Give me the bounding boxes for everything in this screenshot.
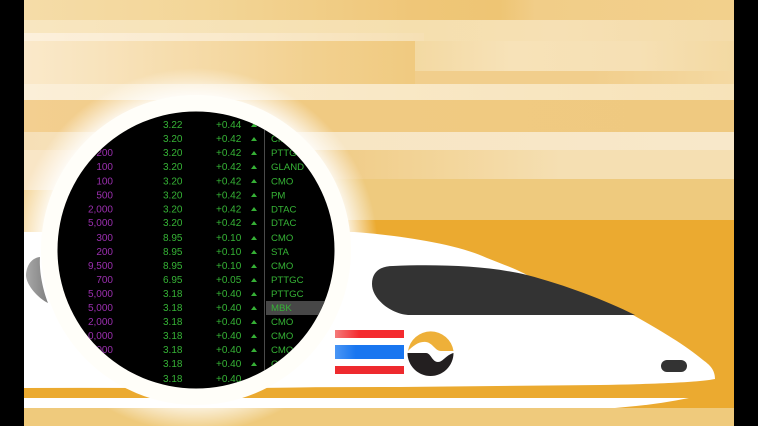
price column: 6.95 <box>163 275 183 286</box>
price column: 3.20 <box>163 218 183 229</box>
symbol column: GLAND <box>271 162 304 173</box>
symbol column: CMO <box>271 345 293 356</box>
symbol column: DTAC <box>271 218 296 229</box>
magnifier lens: white ring <box>41 95 351 405</box>
change column: +0.10 <box>216 233 242 244</box>
symbol column: MBK <box>271 303 292 314</box>
lower white stripe <box>24 398 689 408</box>
change column: +0.42 <box>216 134 242 145</box>
price column: 3.20 <box>163 204 183 216</box>
price column: 3.22 <box>163 120 183 131</box>
volume column: 0,000 <box>88 331 113 342</box>
volume column: 100 <box>96 176 113 188</box>
column divider <box>264 130 265 370</box>
symbol column: CMO <box>271 134 293 145</box>
price column <box>163 120 183 385</box>
train window <box>372 265 635 315</box>
price column: 3.18 <box>163 289 183 300</box>
volume column: 200 <box>96 148 113 159</box>
price column: 3.20 <box>163 162 183 173</box>
price column: 8.95 <box>163 247 183 258</box>
change column: +0.42 <box>216 176 242 188</box>
highlighted row: MBK <box>266 301 325 315</box>
volume column: 500 <box>96 190 113 202</box>
change column: +0.42 <box>216 148 242 159</box>
orange stripe <box>24 388 734 398</box>
volume column <box>88 148 113 356</box>
change column: +0.40 <box>216 331 242 342</box>
tail light: grey half disc <box>26 256 72 305</box>
background: solid orange panel <box>60 220 734 410</box>
price column: 3.18 <box>163 359 183 370</box>
symbol column: CMO <box>271 261 293 272</box>
symbol column: STA <box>271 247 290 258</box>
price column: 3.18 <box>163 345 183 356</box>
price column: 3.18 <box>163 317 183 328</box>
headlight <box>661 360 687 372</box>
price column: 8.95 <box>163 261 183 272</box>
symbol column <box>271 134 304 370</box>
symbol column: CMO <box>271 317 293 328</box>
volume column: 5,000 <box>88 218 113 229</box>
Thai flag stripes <box>335 330 404 374</box>
price column: 3.20 <box>163 148 183 159</box>
change column: +0.42 <box>216 218 242 229</box>
price column: 3.20 <box>163 190 183 202</box>
volume column: 100 <box>96 162 113 173</box>
volume column: 200 <box>96 247 113 258</box>
price column: 3.20 <box>163 176 183 188</box>
change column <box>216 120 242 385</box>
volume column: 700 <box>96 275 113 286</box>
change column: +0.40 <box>216 303 242 314</box>
change column: +0.10 <box>216 261 242 272</box>
change column: +0.05 <box>216 275 242 286</box>
volume column: 000 <box>96 345 113 356</box>
symbol column: CMO <box>271 176 293 188</box>
symbol column: PTTGC <box>271 289 304 300</box>
change column: +0.40 <box>216 345 242 356</box>
change column: +0.44 <box>216 120 242 131</box>
lens glow <box>24 68 388 426</box>
change column: +0.42 <box>216 162 242 173</box>
price column: 3.18 <box>163 303 183 314</box>
up arrows column <box>251 123 257 366</box>
symbol column: DTAC <box>271 204 296 216</box>
price column: 3.20 <box>163 134 183 145</box>
symbol column: PTTGC <box>271 275 304 286</box>
change column: +0.10 <box>216 247 242 258</box>
volume column: 2,000 <box>88 204 113 216</box>
volume column: 300 <box>96 233 113 244</box>
change column: +0.40 <box>216 359 242 370</box>
change column: +0.40 <box>216 317 242 328</box>
symbol column: CMO <box>271 359 293 370</box>
price column: 8.95 <box>163 233 183 244</box>
price column: 3.18 <box>163 374 183 385</box>
change column: +0.40 <box>216 374 242 385</box>
volume column: 5,000 <box>88 289 113 300</box>
train body <box>24 232 734 408</box>
volume column: 5,000 <box>88 303 113 314</box>
symbol column: PM <box>271 190 285 202</box>
price column: 3.18 <box>163 331 183 342</box>
change column: +0.42 <box>216 190 242 202</box>
volume column: 2,000 <box>88 317 113 328</box>
symbol column: CMO <box>271 233 293 244</box>
change column: +0.40 <box>216 289 242 300</box>
volume column: 9,500 <box>88 261 113 272</box>
symbol column: CMO <box>271 331 293 342</box>
logo: orange and black circle with white wave <box>408 331 454 376</box>
stock ticker board <box>88 112 336 388</box>
symbol column: PTTGC <box>271 148 304 159</box>
change column: +0.42 <box>216 204 242 216</box>
